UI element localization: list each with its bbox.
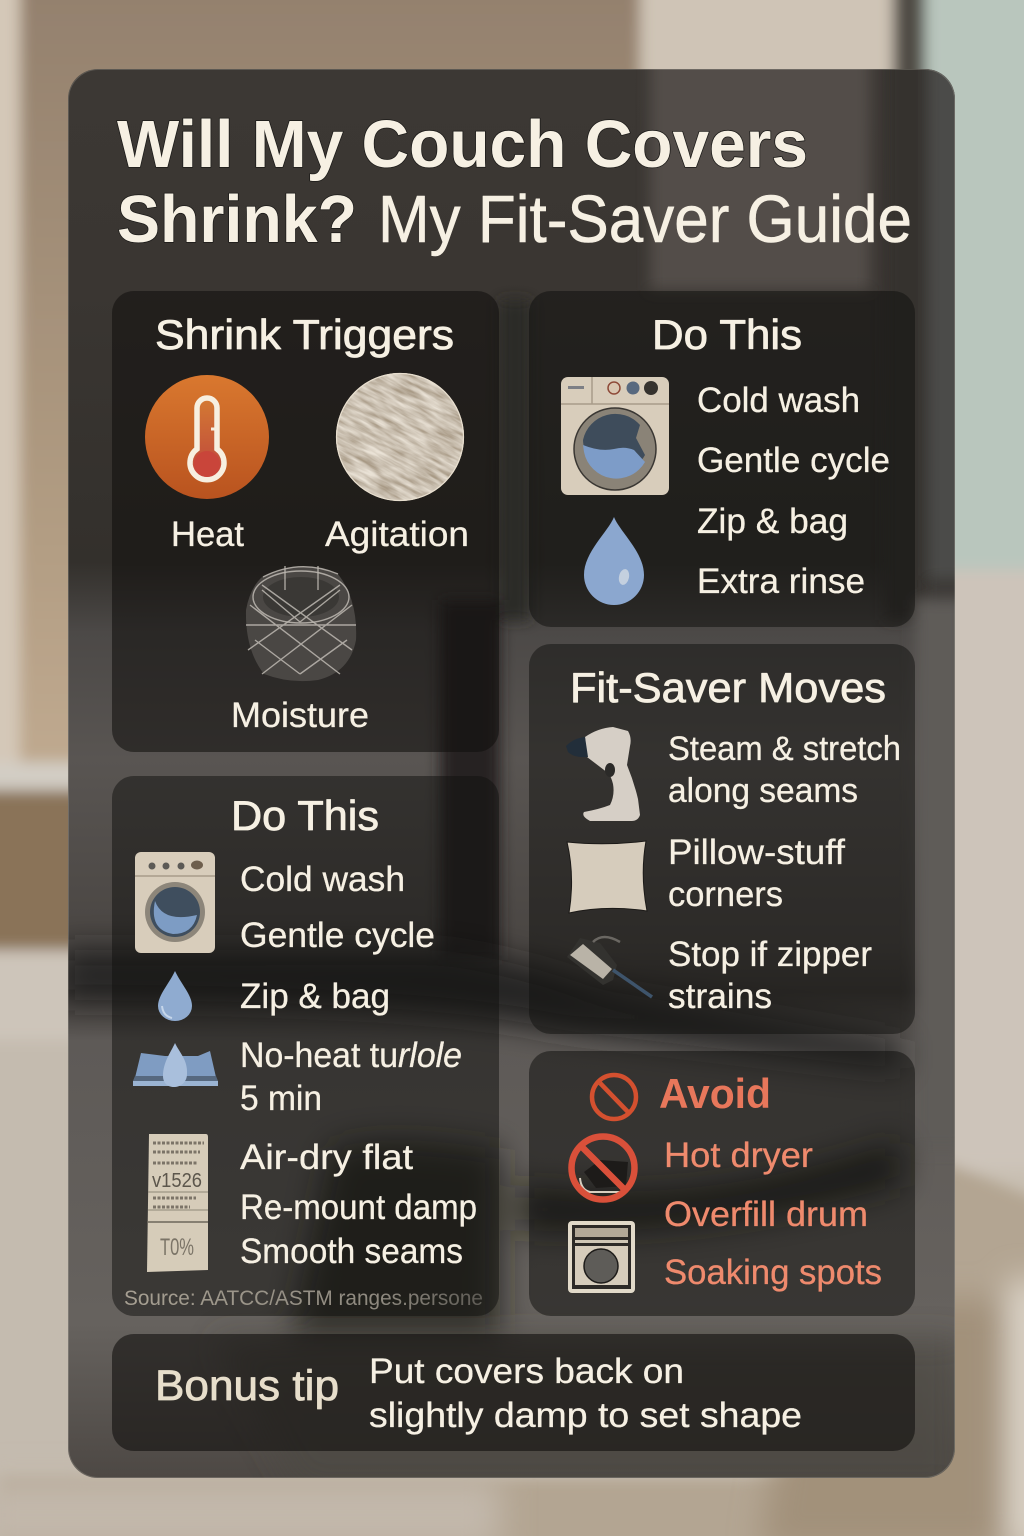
text: overfill drum: Overfill drum (664, 1195, 868, 1234)
title: Will My Couch Covers (117, 107, 808, 182)
heading: do this: Do This (652, 311, 802, 358)
heading: fit-saver moves: Fit-Saver Moves (570, 664, 886, 711)
panel: do this (right) (529, 291, 915, 627)
panel: do this (left) (112, 776, 499, 1316)
panel: avoid (529, 1051, 915, 1316)
heading: shrink triggers: Shrink Triggers (155, 311, 454, 358)
panel: bonus tip (112, 1334, 915, 1451)
text: pillow-stuff: Pillow-stuff (668, 833, 845, 872)
text: cold wash: Cold wash (240, 860, 405, 899)
source note: Source: AATCC/ASTM ranges.persone (124, 1287, 483, 1310)
icon: care label: v1526 (152, 1170, 202, 1192)
icon: water drop (158, 971, 192, 1021)
text: gentle cycle: Gentle cycle (697, 441, 890, 480)
text: air-dry flat: Air-dry flat (240, 1138, 413, 1177)
title: Shrink? (117, 182, 357, 257)
text: five minutes: 5 min (240, 1079, 322, 1118)
icon: no hot dryer (572, 1136, 634, 1200)
icon: steamer (566, 727, 640, 821)
title (117, 107, 912, 257)
text: no-heat tumble: No-heat turlole (240, 1036, 462, 1075)
text: corners: corners (668, 875, 783, 914)
heading: do this: Do This (231, 792, 379, 839)
icon: prohibited small (592, 1075, 636, 1119)
text: gentle cycle: Gentle cycle (240, 916, 435, 955)
label: moisture: Moisture (231, 696, 369, 735)
text: soaking spots: Soaking spots (664, 1253, 882, 1292)
text: strains: strains (668, 977, 772, 1016)
icon: agitation fabric (336, 372, 464, 502)
text: tip body (369, 1352, 802, 1435)
text: smooth seams: Smooth seams (240, 1232, 463, 1271)
title: My Fit-Saver Guide (378, 182, 912, 257)
text: cold wash: Cold wash (697, 381, 860, 420)
label: agitation: Agitation (325, 515, 469, 554)
text: along seams: along seams (668, 772, 858, 810)
text: stop if zipper: Stop if zipper (668, 935, 872, 974)
text: zip and bag: Zip & bag (240, 977, 390, 1016)
icon: overfilled drum (568, 1221, 635, 1293)
icon: pillow (567, 841, 647, 913)
heading: bonus tip: Bonus tip (155, 1362, 339, 1410)
text: tip body: Put covers back on (369, 1352, 684, 1391)
icon: care label (147, 1134, 208, 1272)
label: heat: Heat (171, 515, 244, 554)
icon: heat thermometer (145, 375, 269, 499)
text: extra rinse: Extra rinse (697, 562, 865, 601)
text: re-mount damp: Re-mount damp (240, 1188, 477, 1227)
panel: fit-saver moves (529, 644, 915, 1034)
icon: water drop (584, 517, 644, 605)
text: zip and bag: Zip & bag (697, 502, 848, 541)
panel: shrink triggers (112, 291, 522, 752)
icon: zipper tool (567, 937, 652, 997)
icon: washing machine (135, 852, 215, 953)
icon: washing machine (561, 377, 669, 495)
icon: moisture fabric mesh (246, 566, 356, 681)
heading: avoid: Avoid (659, 1070, 771, 1117)
icon: wet folded cover (133, 1043, 218, 1087)
text: tip body: slightly damp to set shape (369, 1396, 802, 1435)
text: hot dryer: Hot dryer (664, 1136, 813, 1175)
icon: care label: T0% (160, 1234, 194, 1261)
text: steam and stretch: Steam & stretch (668, 730, 901, 768)
